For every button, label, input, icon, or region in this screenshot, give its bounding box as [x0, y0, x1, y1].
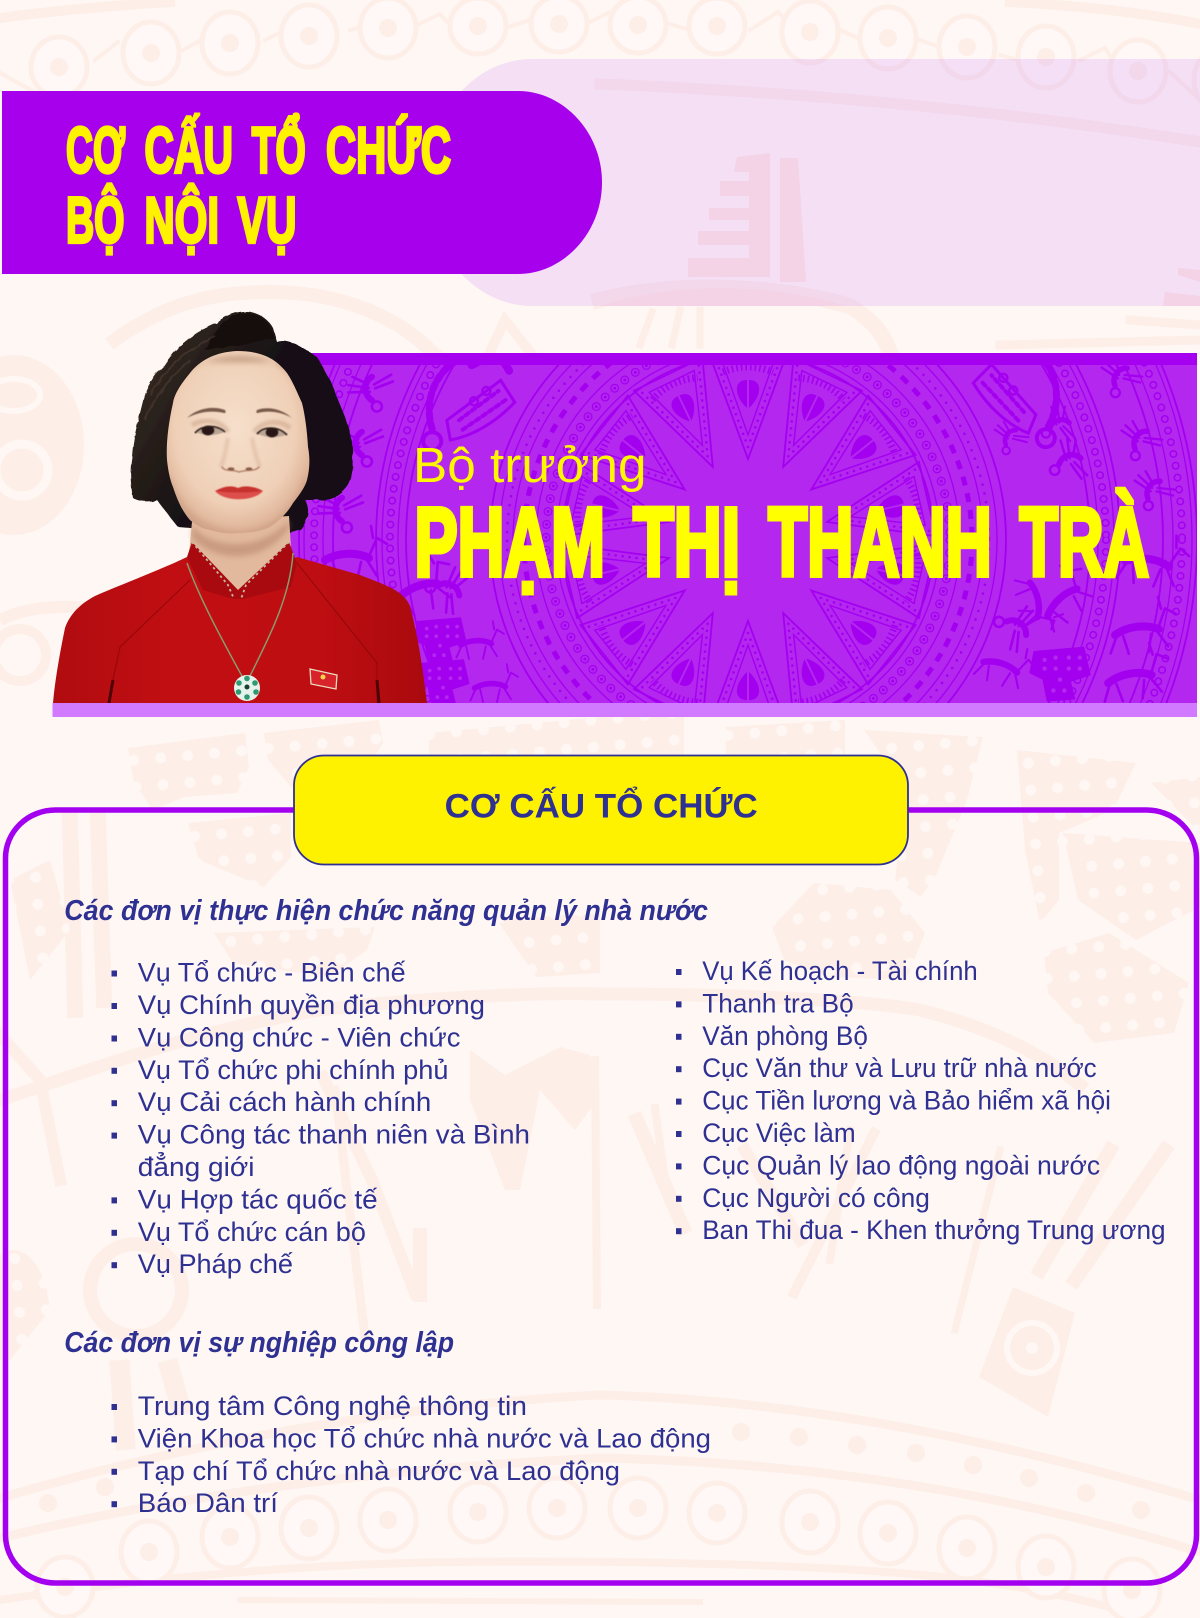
right eye	[257, 428, 287, 438]
item: Vụ Pháp chế	[138, 1249, 293, 1279]
title text line 1: CƠ	[66, 114, 125, 186]
list: state management units, right column	[676, 956, 1166, 1245]
minister name: PHẠM	[414, 488, 605, 596]
lips	[215, 486, 263, 499]
banner drum pattern	[298, 365, 1197, 703]
title text line 1: CẤU	[144, 114, 233, 186]
item: Cục Quản lý lao động ngoài nước	[702, 1150, 1100, 1180]
item: Vụ Cải cách hành chính	[138, 1087, 431, 1117]
drum dotted blobs	[0, 717, 1200, 1360]
item: Vụ Kế hoạch - Tài chính	[702, 956, 978, 986]
minister name: THỊ	[633, 488, 740, 596]
left eyebrow	[187, 408, 226, 418]
item: Cục Người có công	[702, 1183, 930, 1213]
title text line 2	[66, 184, 296, 256]
item: Văn phòng Bộ	[702, 1021, 868, 1051]
item: Tạp chí Tổ chức nhà nước và Lao động	[138, 1456, 620, 1486]
item: Cục Tiền lương và Bảo hiểm xã hội	[702, 1086, 1111, 1116]
lower left ring	[0, 607, 182, 1336]
item: Viện Khoa học Tổ chức nhà nước và Lao động	[138, 1423, 711, 1453]
panel: organizational structure frame	[6, 810, 1196, 1583]
item: Vụ Hợp tác quốc tế	[138, 1184, 378, 1214]
item: Thanh tra Bộ	[702, 988, 854, 1018]
minister banner	[290, 353, 1197, 703]
title text line 1	[66, 114, 451, 186]
item: Vụ Tổ chức phi chính phủ	[138, 1055, 449, 1085]
lower right diamond	[979, 1287, 1075, 1417]
minister name: THANH	[768, 488, 992, 596]
pale lilac band behind title	[427, 59, 1200, 306]
minister role: Bộ trưởng	[413, 439, 646, 493]
nose	[222, 467, 259, 472]
item: Vụ Công tác thanh niên và Bình	[138, 1120, 530, 1150]
face	[167, 351, 309, 533]
item: Cục Việc làm	[702, 1118, 856, 1148]
title text line 2: NỘI	[144, 184, 219, 256]
item: Vụ Công chức - Viên chức	[138, 1022, 460, 1052]
section heading text: CƠ CẤU TỔ CHỨC	[445, 785, 758, 825]
item: Trung tâm Công nghệ thông tin	[138, 1391, 527, 1421]
dress	[53, 557, 427, 703]
item: Vụ Chính quyền địa phương	[138, 990, 485, 1020]
item: Cục Văn thư và Lưu trữ nhà nước	[702, 1053, 1097, 1083]
title text line 2: BỘ	[66, 184, 124, 256]
circle chain bottom	[37, 1478, 1160, 1618]
stepped comb motif	[600, 153, 1200, 306]
right eyebrow	[256, 408, 292, 418]
item: đẳng giới	[138, 1152, 254, 1182]
collar	[187, 542, 297, 599]
hair	[131, 312, 353, 534]
title text line 1: TỔ	[252, 114, 306, 186]
left eye shape	[0, 355, 84, 535]
list: public service units	[112, 1391, 711, 1518]
title text line 2: VỤ	[238, 184, 296, 256]
title panel	[2, 91, 602, 274]
portrait of the minister	[53, 312, 427, 703]
item: Vụ Tổ chức - Biên chế	[138, 958, 406, 988]
title text line 1: CHỨC	[326, 114, 451, 186]
heading: public service units: Các đơn vị sự nghiệp công lập	[64, 1327, 454, 1359]
party flag pin	[310, 669, 337, 689]
item	[112, 1120, 530, 1182]
list: state management units, left column	[112, 958, 530, 1279]
face shading	[165, 356, 310, 540]
banner bottom strip	[52, 703, 1197, 717]
pendant	[234, 675, 260, 701]
figure shape in mid background	[470, 1047, 597, 1190]
section heading box	[294, 756, 908, 864]
necklace	[187, 553, 293, 678]
circle chain top	[31, 0, 1200, 111]
item: Vụ Tổ chức cán bộ	[138, 1217, 366, 1247]
minister name	[414, 488, 1149, 596]
item: Ban Thi đua - Khen thưởng Trung ương	[702, 1215, 1166, 1245]
left eye	[195, 426, 225, 436]
neck	[189, 516, 291, 596]
item: Báo Dân trí	[138, 1488, 279, 1518]
banner top strip	[290, 353, 1197, 365]
heading: state management units: Các đơn vị thực hiện chức năng quản lý nhà nước	[64, 895, 708, 927]
